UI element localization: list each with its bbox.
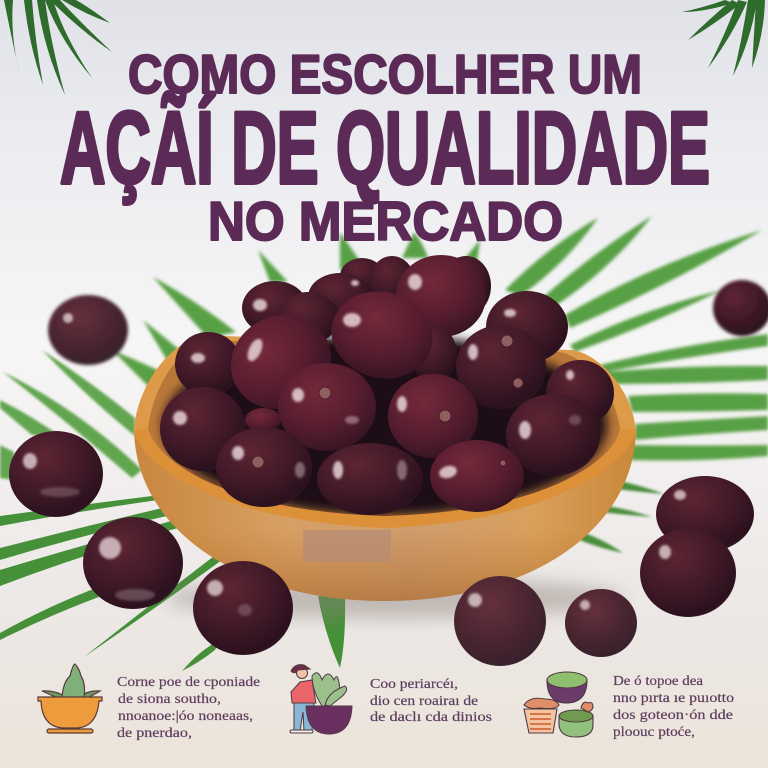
palm leaves under the loose berries: [0, 495, 345, 671]
caption 3: ploouc ptoće,: [613, 724, 695, 739]
title: [60, 43, 710, 252]
caption 1: [117, 674, 260, 740]
caption 2: de daclı cda dinios: [370, 709, 492, 724]
caption 2: [370, 676, 492, 724]
palm frond: top left corner: [4, 0, 112, 95]
palm frond: top right corner: [682, 0, 765, 76]
caption 1: Corne poe de cponiade: [117, 674, 260, 689]
palm leaves at lower right: [575, 480, 664, 553]
caption 3: De ó topoe dea: [613, 673, 703, 688]
caption 3: dos goteon·ón dde: [613, 707, 733, 722]
palm leaves behind the bowl, upper part: [112, 216, 768, 460]
icon: bowl with leaves: [38, 664, 102, 733]
title: COMO ESCOLHER UM: [128, 43, 642, 105]
icon: person with plant in purple bowl: [290, 665, 352, 734]
soft shadow under bowl: [165, 578, 625, 618]
loose acai berries: [9, 280, 768, 666]
caption 1: de siona southo,: [118, 691, 221, 706]
caption 2: Coo periarcéı,: [370, 676, 458, 691]
caption 3: nno pırta ıe puıotto: [613, 690, 734, 705]
caption 1: de pnerdao,: [117, 725, 192, 740]
caption 3: [613, 673, 734, 739]
icon: acai bowls and cups: [524, 672, 593, 737]
palm leaves at left: [0, 350, 142, 480]
acai berries in the bowl: [160, 255, 614, 515]
caption 1: nnoanoe:|óo noneaas,: [118, 708, 253, 723]
title: NO MERCADO: [208, 190, 563, 252]
caption 2: dio cen roairaı de: [370, 693, 478, 708]
wooden bowl: [134, 335, 636, 601]
